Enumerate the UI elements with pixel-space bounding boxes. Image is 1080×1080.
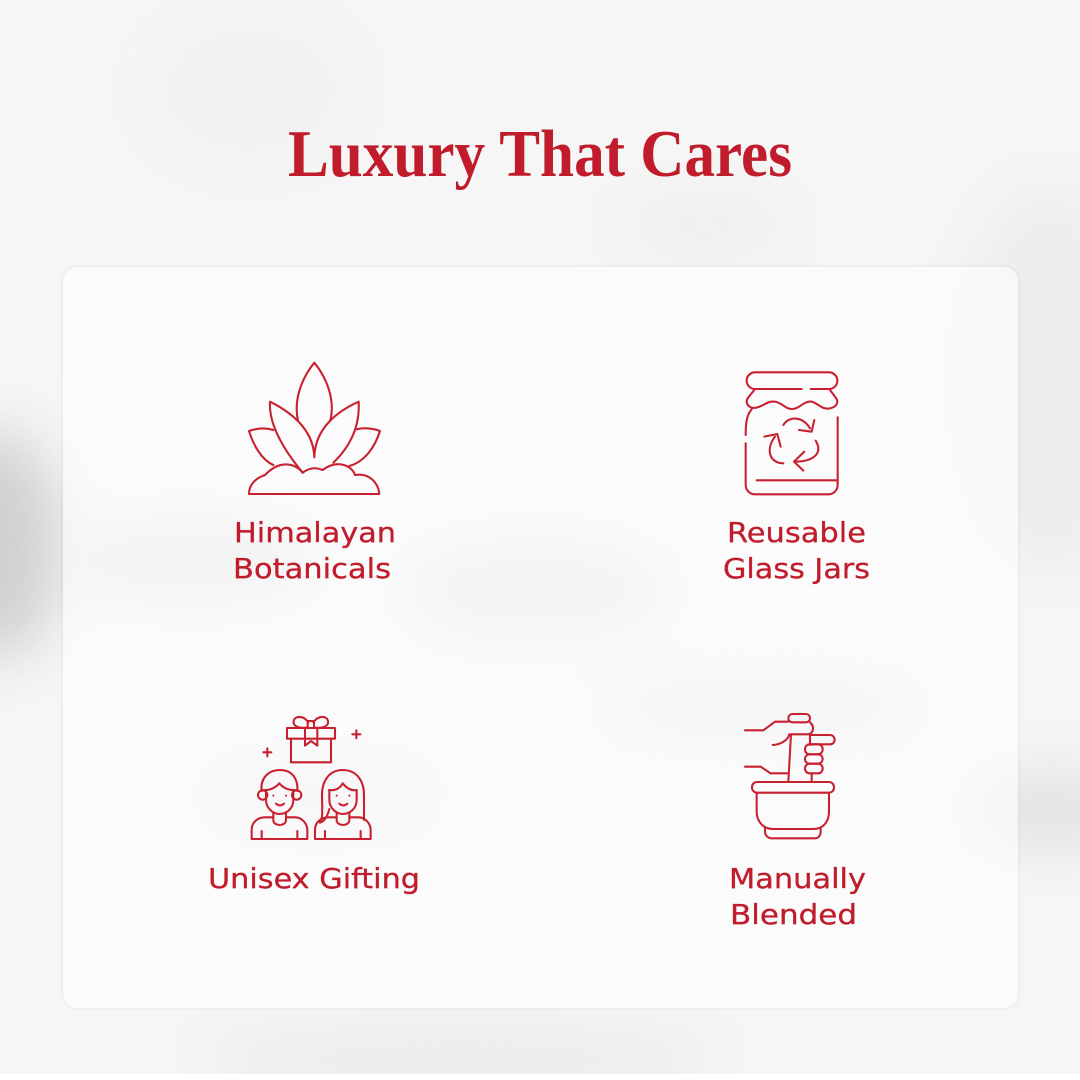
label: reusable glass jars: Reusable bbox=[727, 517, 866, 549]
label: himalayan botanicals bbox=[233, 517, 396, 585]
label: unisex gifting: Unisex Gifting bbox=[208, 863, 420, 895]
label: reusable glass jars: Glass Jars bbox=[723, 553, 870, 585]
panel: features card bbox=[63, 267, 1018, 1008]
icon: manually blended mortar and pestle bbox=[745, 714, 835, 838]
label: reusable glass jars bbox=[723, 517, 870, 585]
icon: unisex gifting bbox=[252, 717, 371, 839]
icon: himalayan botanicals lotus bbox=[249, 363, 380, 494]
label: himalayan botanicals: Himalayan bbox=[234, 517, 396, 549]
label: manually blended: Manually bbox=[729, 863, 866, 895]
label: manually blended: Blended bbox=[730, 899, 857, 931]
title: Luxury That Cares bbox=[288, 117, 792, 191]
label: manually blended bbox=[729, 863, 866, 931]
label: himalayan botanicals: Botanicals bbox=[233, 553, 391, 585]
icon: reusable glass jar bbox=[746, 372, 838, 494]
